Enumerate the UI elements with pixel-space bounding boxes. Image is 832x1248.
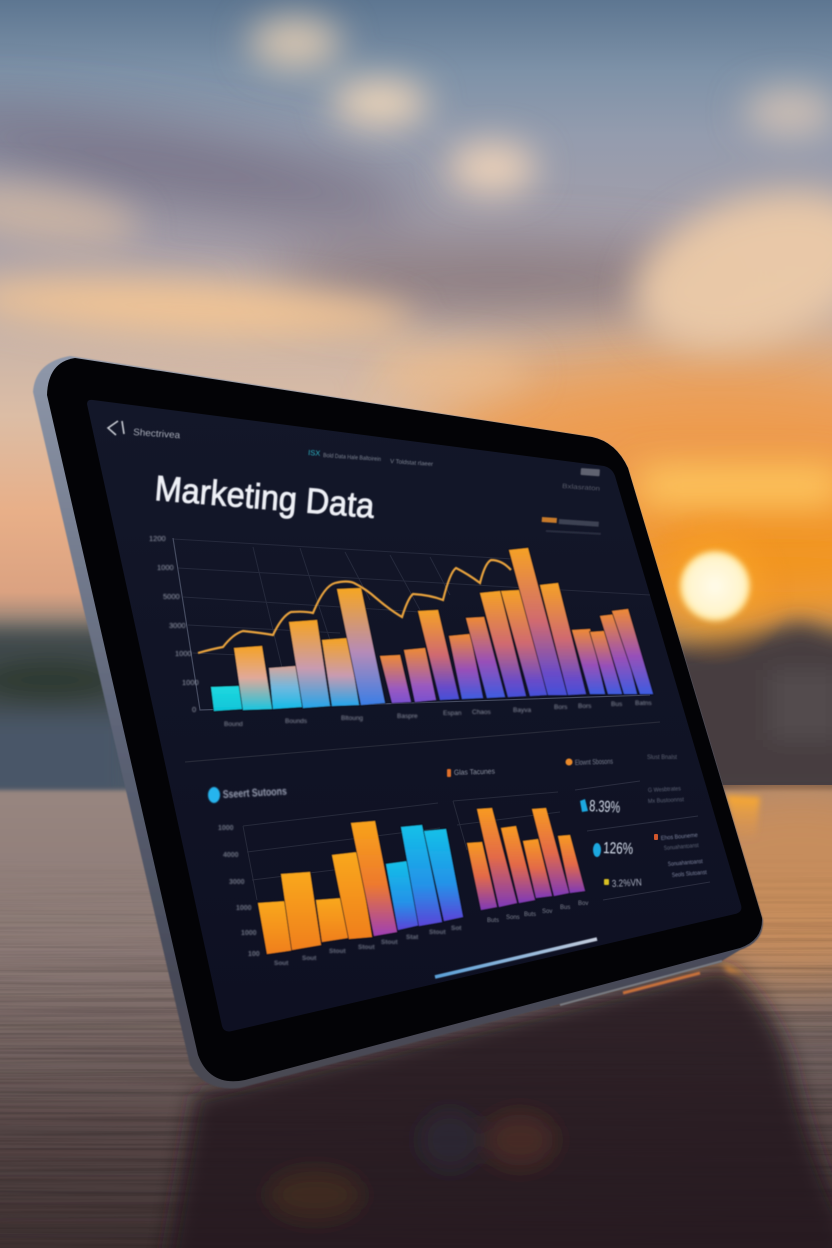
y axis labels: 1000 (236, 905, 252, 912)
side text rows: Ehos Bouneme (661, 833, 699, 842)
icon: setting sun (635, 506, 795, 666)
line series (198, 560, 511, 653)
app name: Shectrivea (133, 427, 181, 441)
lower left bar chart (208, 786, 463, 967)
x axis labels: Bors (554, 704, 568, 711)
x axis labels: Buts (524, 912, 536, 918)
bars (467, 808, 585, 910)
chart heading (208, 786, 287, 803)
x axis labels: Sov (542, 909, 552, 915)
x axis labels: Chaos (472, 709, 492, 716)
y axis labels: 100 (248, 951, 260, 958)
panel heading: Slust Bnalst (647, 754, 677, 761)
stat: second percentage (593, 840, 633, 858)
blurred clouds (0, 17, 832, 396)
x axis labels: Stout (429, 929, 446, 936)
x axis labels: Bus (611, 701, 623, 708)
tablet bezel (47, 358, 762, 1081)
panel heading (566, 754, 677, 767)
chart heading: Glas Tacunes (454, 767, 495, 777)
orange light under tablet corner (722, 963, 745, 974)
y axis labels: 1200 (149, 534, 166, 543)
y axis labels: 1000 (218, 825, 234, 832)
wooden table (0, 775, 832, 1248)
grid lines (173, 539, 650, 680)
edge highlight (560, 961, 722, 1005)
x axis labels: Sout (274, 960, 289, 967)
grid lines (243, 803, 440, 900)
x axis labels: Baspre (397, 713, 418, 720)
main bar and line chart (149, 534, 653, 728)
horizon glow (640, 468, 832, 504)
stat: third value (604, 877, 642, 890)
y axis labels: 1000 (157, 563, 174, 572)
legend (542, 517, 601, 535)
top bar of dashboard (108, 421, 601, 493)
y axis labels: 0 (192, 705, 196, 714)
edge orange glow (623, 973, 700, 993)
bars (211, 548, 653, 711)
background: blurred horizon city (0, 622, 832, 808)
x axis labels: Bounds (285, 718, 308, 725)
x axis labels: Buts (487, 918, 499, 924)
icon: back arrow (108, 421, 124, 435)
y axis labels: 4000 (223, 852, 239, 859)
x axis labels: Stout (381, 939, 398, 946)
x axis labels: Espan (443, 710, 462, 717)
y axis labels: 1000 (241, 930, 257, 937)
middle bar chart (447, 767, 588, 924)
top bar of dashboard: V Toldstat rlaeer (390, 459, 433, 468)
side text rows: Seols Slutoanst (672, 870, 707, 879)
x axis labels: Bors (578, 703, 592, 710)
stat: first percentage (580, 798, 621, 817)
side text rows: Mx Bustoonnst (648, 797, 684, 805)
y axis labels: 3000 (229, 879, 245, 886)
x axis labels: Stout (329, 948, 346, 955)
stat: third value: 3.2%VN (612, 877, 642, 890)
x axis labels: Bltoung (341, 715, 363, 722)
x axis labels (224, 700, 652, 728)
x axis labels: Stout (358, 944, 375, 951)
top bar of dashboard: Bxlasraton (562, 483, 601, 493)
y axis labels (149, 534, 199, 714)
divider (185, 722, 660, 762)
small orange bullet (654, 834, 658, 840)
x axis labels (274, 925, 462, 967)
nav tab text: ISX (308, 448, 321, 458)
tablet reflection on table (165, 965, 832, 1248)
x axis labels: Stat (406, 934, 419, 941)
x axis labels: Sout (302, 955, 317, 962)
side text rows: Sonuahantoanst (668, 859, 703, 868)
side text rows: Sonuahantoanst (664, 843, 699, 852)
dark cloud band (0, 84, 730, 312)
x axis labels: Bov (578, 901, 588, 907)
y axis labels: 1000 (175, 649, 192, 658)
stat: second percentage: 126% (603, 840, 633, 858)
x axis labels: Bound (224, 721, 243, 728)
home indicator bar (435, 939, 597, 977)
x axis labels: Sot (451, 925, 462, 932)
background: sunset sky (0, 0, 832, 800)
y axis labels: 3000 (169, 621, 186, 630)
tablet frame (33, 356, 763, 1089)
x axis labels: Batns (635, 700, 652, 707)
divider lines (575, 781, 710, 900)
x axis labels: Sons (506, 915, 520, 921)
bars (258, 821, 463, 954)
warm haze towards the sun (420, 350, 832, 630)
screen (87, 400, 741, 1031)
side text rows (648, 786, 707, 879)
stats panel (566, 754, 710, 900)
panel heading: Elownt Sbosons (575, 757, 613, 767)
x axis labels: Bayva (513, 707, 531, 714)
top bar of dashboard: Bold Data Hale Baltoirein (323, 453, 381, 463)
x axis labels: Bus (560, 905, 570, 911)
grid lines (453, 792, 560, 850)
y axis labels: 5000 (163, 592, 180, 601)
tablet (33, 356, 763, 1089)
chart heading: Sseert Sutoons (223, 786, 287, 801)
y axis labels (218, 825, 260, 958)
y axis labels: 1000 (182, 678, 199, 687)
title: Marketing Data (153, 468, 376, 526)
x axis labels (487, 901, 588, 924)
y axis (173, 538, 650, 710)
stat: first percentage: 8.39% (589, 798, 621, 817)
side text rows: G Wesbtrates (648, 786, 681, 794)
